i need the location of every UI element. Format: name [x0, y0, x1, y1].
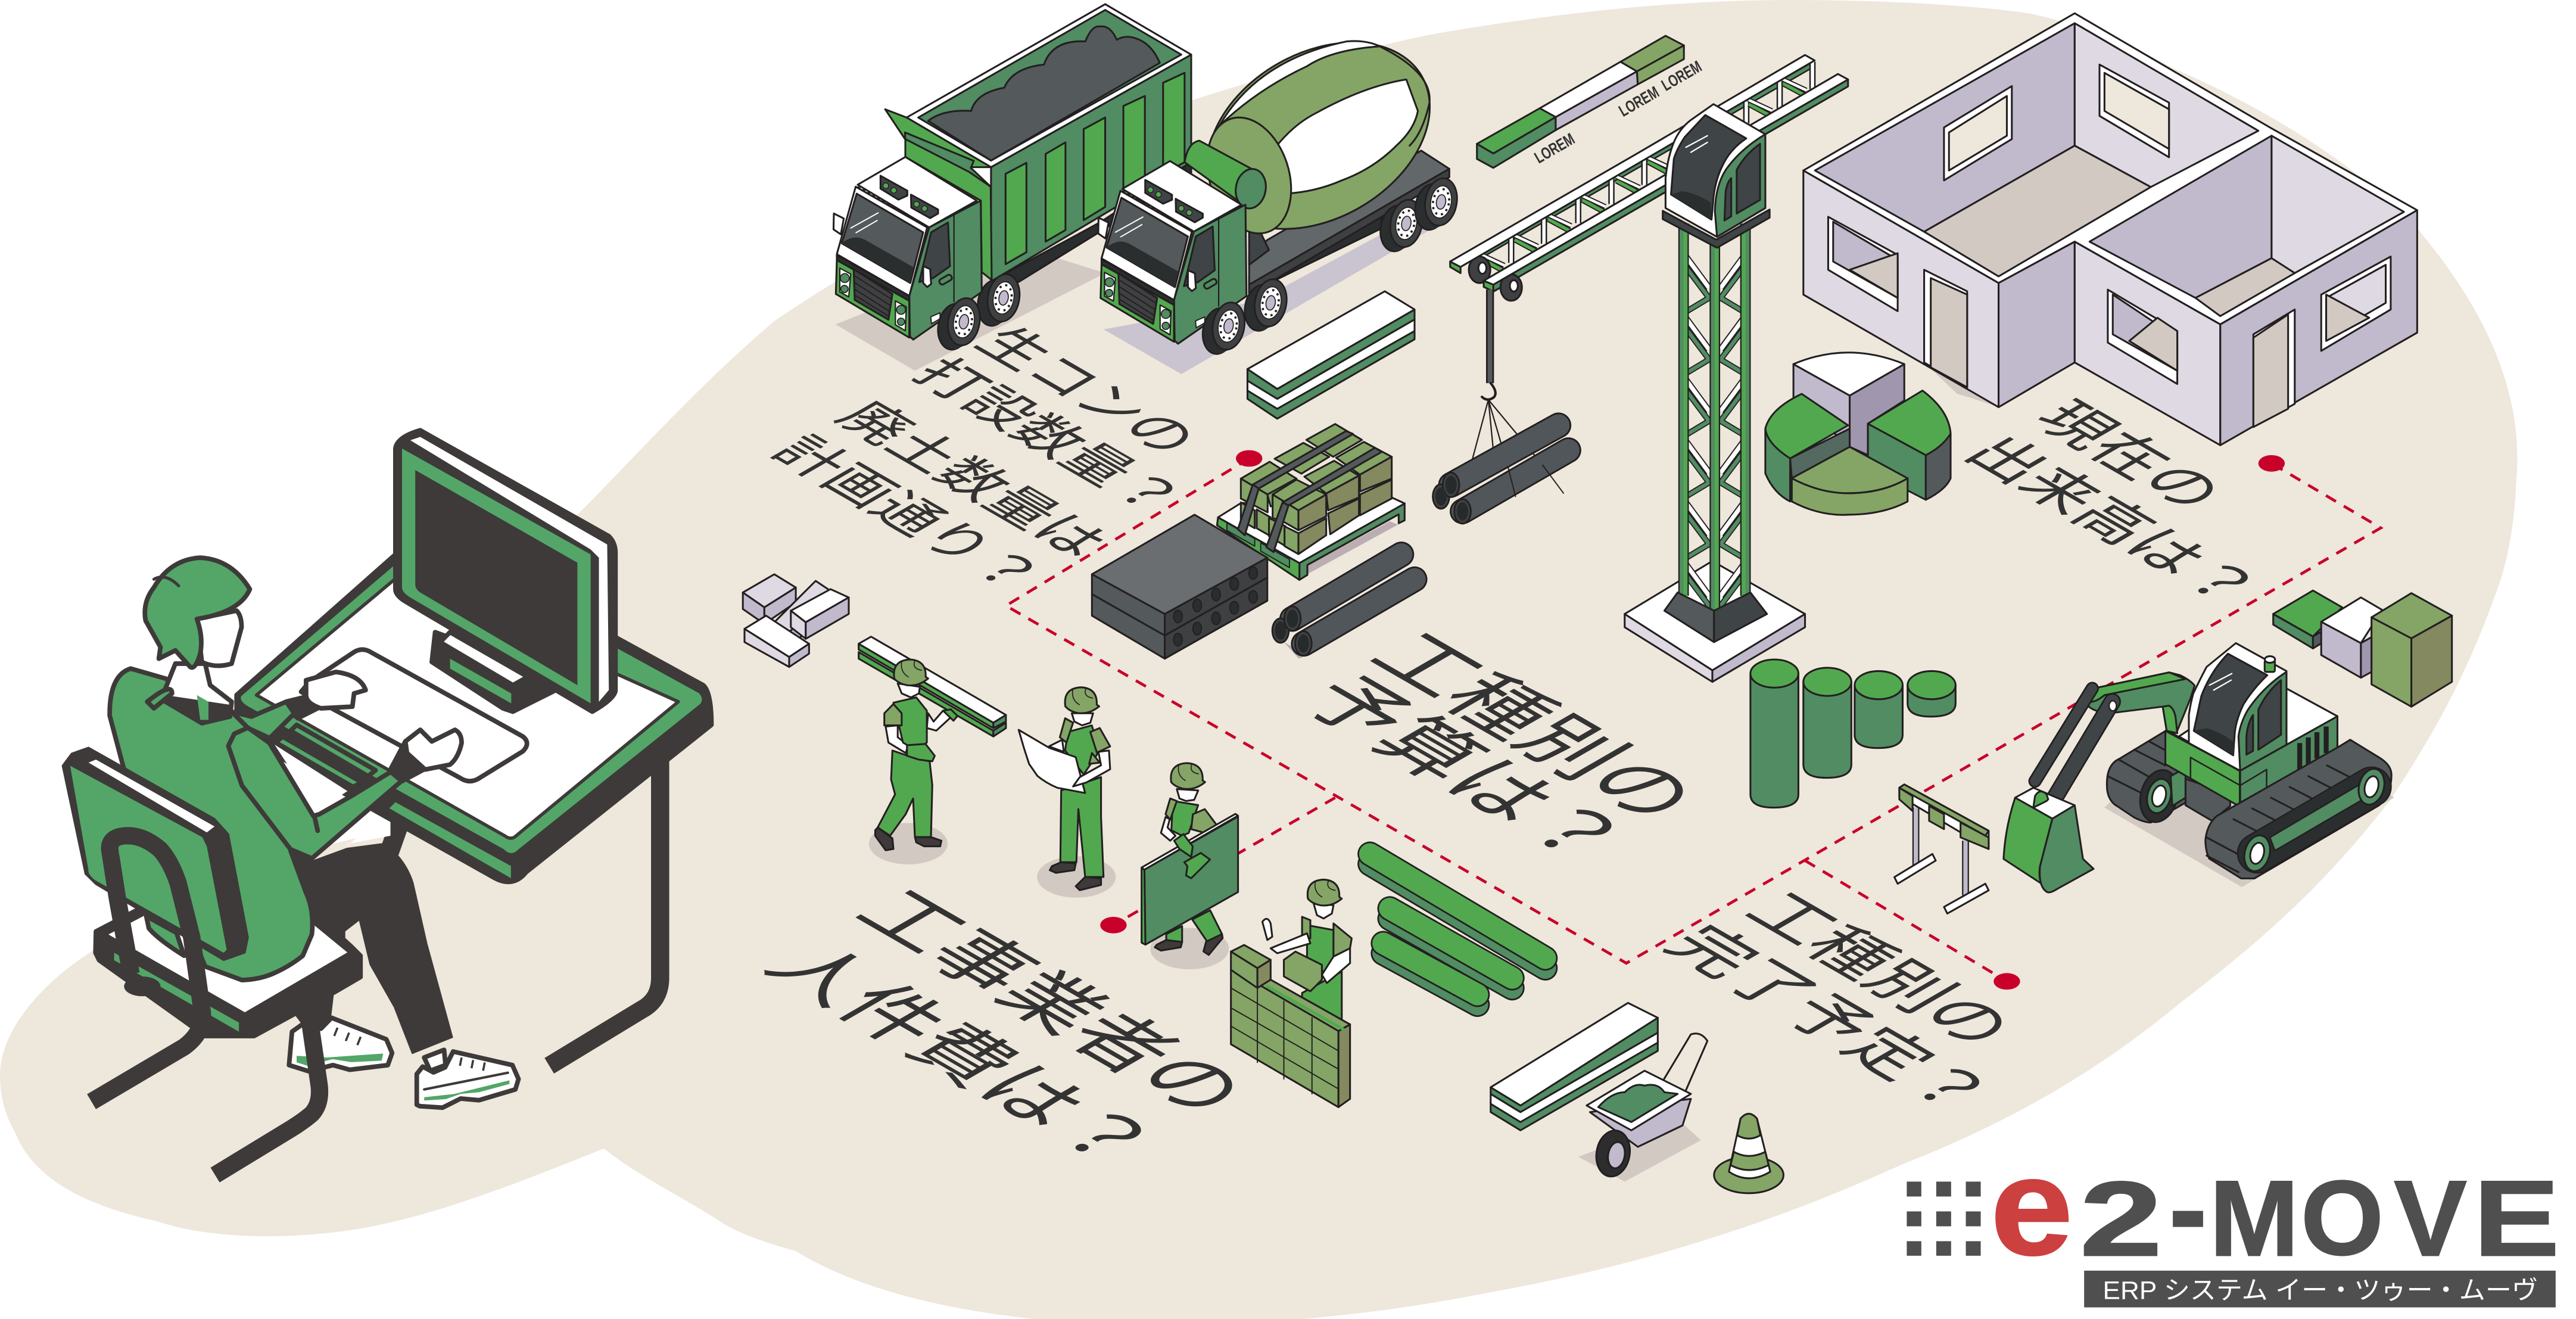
window back right [2100, 64, 2169, 157]
crane foot [1664, 592, 1767, 642]
logo wordmark: - [2169, 1139, 2207, 1278]
logo dot grid [1907, 1181, 1981, 1256]
white space beneath arm [275, 745, 347, 811]
chair tube frame [92, 836, 203, 1102]
question: budget by work type [1282, 621, 1718, 876]
question: concrete and soil volume [758, 319, 1211, 601]
LOREM labels: LOREM [1658, 57, 1705, 95]
logo subtitle: ERP システム イー・ツゥー・ムーヴ [2103, 1277, 2538, 1305]
green capsule beams [1370, 854, 1545, 1004]
excavator [2004, 643, 2394, 892]
trousers [291, 843, 453, 1054]
worker bib [893, 698, 927, 751]
front track [2206, 740, 2391, 878]
LOREM labels: LOREM [1615, 83, 1662, 120]
lower chair back [147, 916, 184, 956]
rear track [2107, 730, 2217, 826]
traffic cone [1714, 1114, 1783, 1193]
keyboard pad [301, 649, 527, 781]
question: concrete and soil volume: 打設数量？ [899, 351, 1197, 522]
question: completion schedule: 工種別の [1729, 883, 2030, 1057]
chair tube inner panel [119, 845, 176, 923]
wheelbarrow [1578, 1034, 1708, 1181]
worker carrying panel [1142, 763, 1238, 969]
stick [2035, 689, 2112, 798]
3D pie chart [1765, 353, 1951, 515]
window front 1 [1828, 217, 1898, 311]
blocks [1241, 502, 1255, 528]
desk leg [549, 761, 660, 1066]
chair tube foot [124, 976, 160, 996]
question: labour cost of contractors [747, 879, 1266, 1180]
worker arms [927, 711, 951, 730]
arms [228, 672, 462, 858]
question: current progress: 出来高は？ [1951, 427, 2275, 615]
worker legs [878, 751, 932, 837]
question: concrete and soil volume: 廃土数量は [823, 394, 1121, 565]
stacked pipes on ground [1272, 555, 1415, 659]
beam [859, 652, 993, 736]
person torso [110, 668, 313, 980]
gloves [1174, 834, 1193, 857]
logo wordmark: e [1991, 1130, 2073, 1284]
bricklaying worker and wall [1231, 879, 1351, 1107]
small lavender blocks [743, 574, 849, 667]
chair back [63, 748, 248, 960]
pallet of material blocks [1217, 424, 1404, 580]
question: labour cost of contractors: 人件費は？ [747, 932, 1177, 1180]
logo wordmark [1991, 1130, 2559, 1284]
question: labour cost of contractors: 工事業者の [837, 879, 1266, 1127]
chair seat [95, 853, 360, 1036]
crane mast [1684, 223, 1746, 621]
concrete mixer truck [1098, 5, 1463, 374]
road barrier [1895, 785, 1989, 913]
second stacked boards [1491, 1003, 1658, 1130]
question: completion schedule: 完了予定？ [1650, 916, 2009, 1124]
logo subtitle band [2084, 1271, 2556, 1307]
logo wordmark: V [2394, 1159, 2467, 1278]
green cylinders [1750, 660, 1955, 808]
red dots [1100, 450, 2285, 990]
dump truck [833, 4, 1191, 371]
three blocks [2273, 590, 2452, 707]
isometric house [1803, 13, 2417, 445]
question: current progress: 現在の [2020, 393, 2239, 519]
logo [1907, 1130, 2559, 1307]
pallet [1300, 503, 1404, 580]
door front 1 [1924, 270, 1967, 387]
stacked boards [1247, 291, 1415, 419]
question: concrete and soil volume: 生コンの [962, 319, 1211, 463]
window back left [1944, 86, 2012, 181]
hanging pipes [1433, 425, 1568, 524]
body and cabin [2166, 643, 2337, 821]
near shoe [417, 1050, 519, 1108]
door front 2 [2253, 310, 2295, 427]
concrete slabs [1092, 515, 1267, 659]
logo wordmark: 2 [2080, 1159, 2163, 1278]
dashed connector network [1006, 459, 2381, 981]
window front 2 [2108, 290, 2178, 384]
stem under seat [294, 991, 334, 1034]
chair leg 2 [215, 1013, 320, 1175]
white gap below arm [347, 816, 391, 846]
logo wordmark: E [2474, 1159, 2559, 1278]
brick wall [1231, 945, 1350, 1107]
tray strips [275, 725, 376, 787]
bucket [2004, 788, 2094, 892]
crane cabin [1663, 104, 1770, 248]
worker reading blueprint [1018, 688, 1116, 898]
thigh under desk [382, 819, 407, 856]
far shoe [289, 1018, 392, 1071]
boom arm [2084, 673, 2195, 733]
head [145, 558, 250, 723]
hook and ropes [1472, 290, 1543, 468]
straps [1253, 431, 1353, 489]
LOREM colour bar [1477, 36, 1705, 168]
LOREM labels [1531, 57, 1705, 167]
window front 3 [2321, 257, 2391, 351]
panel [1142, 814, 1238, 870]
monitor [395, 430, 615, 711]
question: budget by work type: 工種別の [1351, 621, 1718, 833]
front walls [1803, 170, 1999, 407]
logo wordmark: O [2301, 1159, 2384, 1277]
crane jib [1450, 55, 1848, 301]
worker carrying beam [859, 637, 1006, 864]
crane with hanging pipes [1433, 55, 1848, 682]
room 1 [1815, 23, 2074, 232]
LOREM labels: LOREM [1531, 129, 1578, 167]
computer desk scene [63, 430, 711, 1175]
monitor stand [432, 632, 556, 711]
room 2 [2089, 136, 2272, 298]
question: budget by work type: 予算は？ [1282, 664, 1648, 876]
desk top [236, 555, 711, 882]
crane base plinth [1625, 561, 1805, 682]
logo wordmark: M [2210, 1159, 2299, 1278]
question: concrete and soil volume: 計画通り？ [758, 428, 1056, 601]
